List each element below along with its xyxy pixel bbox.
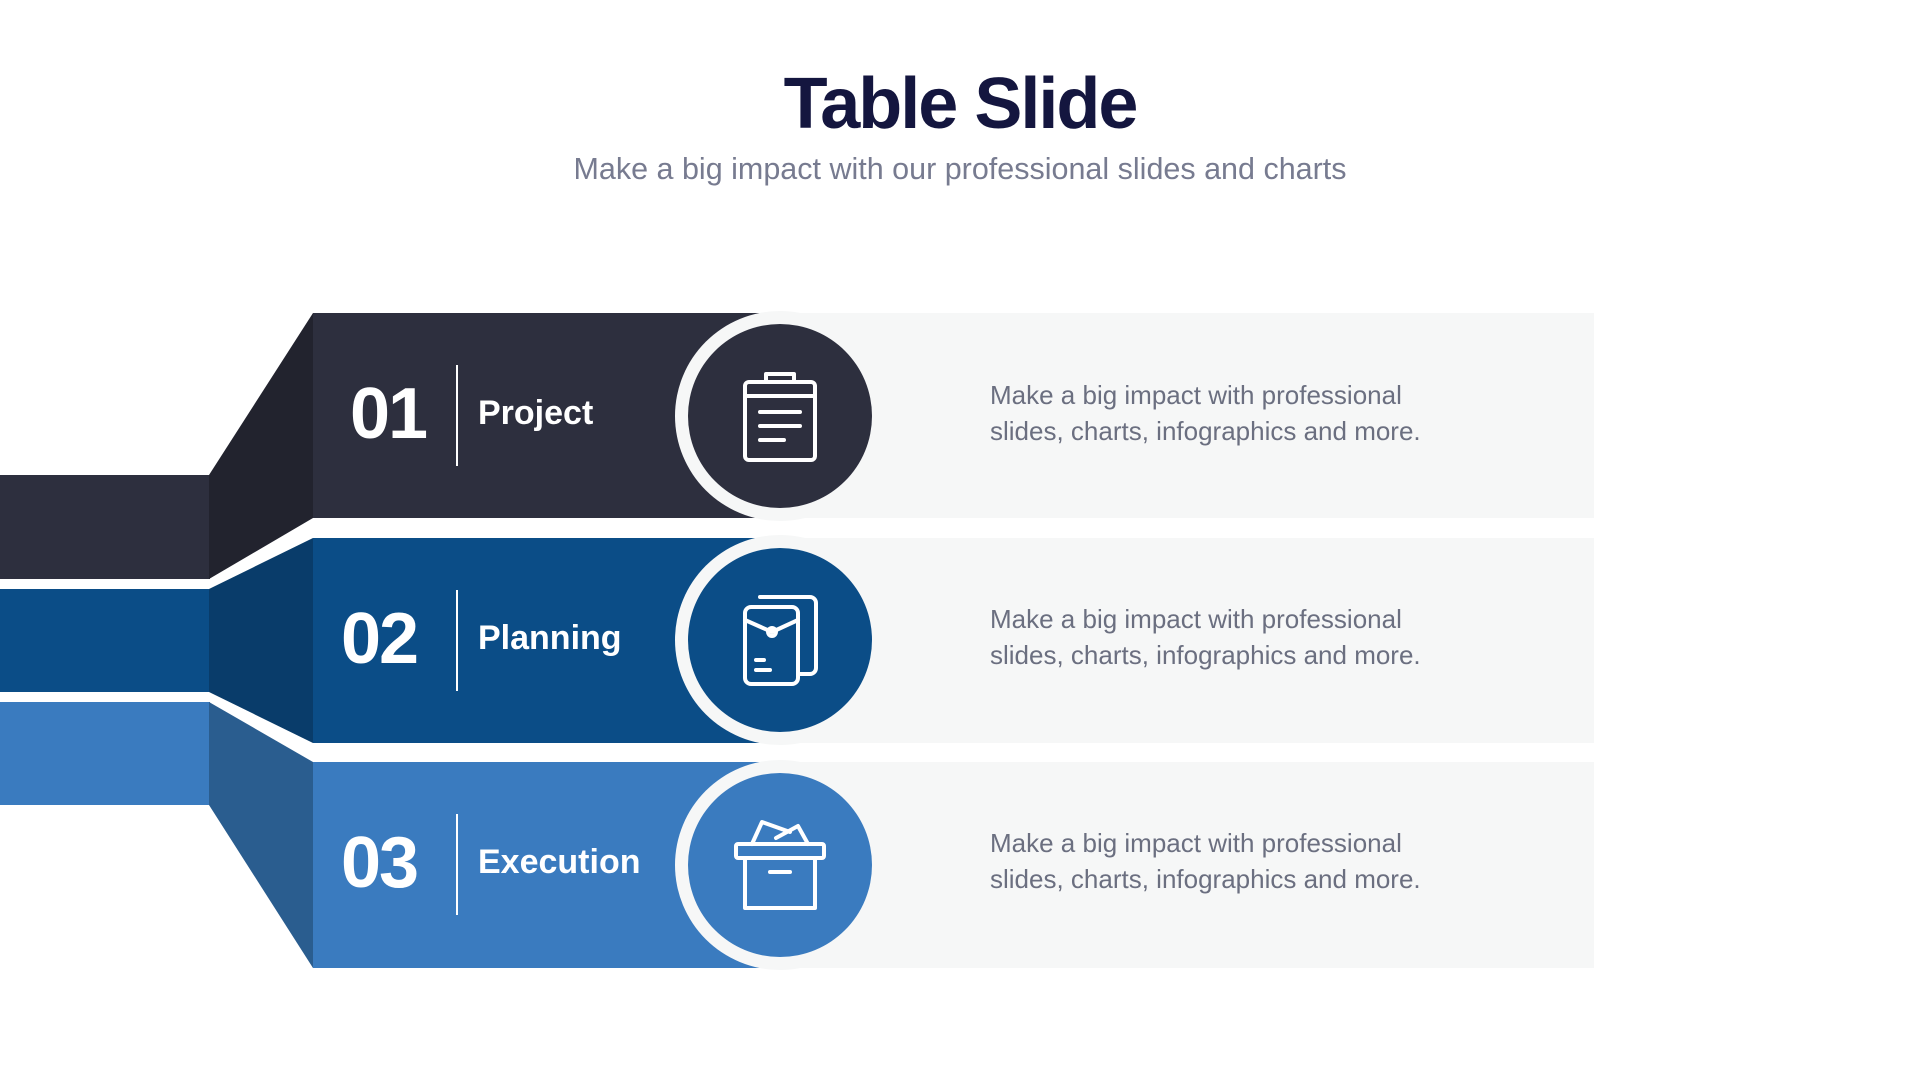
band 2: [313, 538, 760, 743]
body text 3: slides, charts, infographics and more.: [990, 864, 1421, 894]
number 01: 01: [350, 374, 427, 454]
number 02: 02: [341, 599, 417, 679]
icon: folder: [745, 597, 816, 684]
band 1: [313, 313, 760, 518]
circle 2: [675, 535, 885, 745]
gray panel 1: [313, 313, 1594, 518]
body text 1: slides, charts, infographics and more.: [990, 416, 1421, 446]
row 3: Execution: [0, 702, 1594, 970]
side 3: [209, 702, 313, 968]
gray panel 3: [313, 762, 1594, 968]
band 3: [313, 762, 760, 968]
row 1: Project: [0, 311, 1594, 579]
gray panel 2: [313, 538, 1594, 743]
body text 2: slides, charts, infographics and more.: [990, 640, 1421, 670]
label Project: Project: [478, 394, 593, 432]
number 03: 03: [341, 823, 417, 903]
left stub 1: [0, 475, 210, 579]
side 1: [209, 313, 313, 579]
icon: clipboard: [745, 374, 815, 460]
label Execution: Execution: [478, 843, 640, 881]
circle 1: [675, 311, 885, 521]
side 2: [209, 538, 313, 743]
left stub 3: [0, 702, 210, 805]
body text 2: Make a big impact with professional: [990, 604, 1402, 634]
body text 3: Make a big impact with professional: [990, 828, 1402, 858]
label Planning: Planning: [478, 619, 622, 657]
title: Table Slide: [784, 64, 1136, 144]
body text 1: Make a big impact with professional: [990, 380, 1402, 410]
subtitle: Make a big impact with our professional slides and charts: [573, 152, 1347, 186]
circle 3: [675, 760, 885, 970]
icon: archive box: [736, 822, 824, 908]
left stub 2: [0, 589, 210, 692]
row 2: Planning: [0, 535, 1594, 745]
